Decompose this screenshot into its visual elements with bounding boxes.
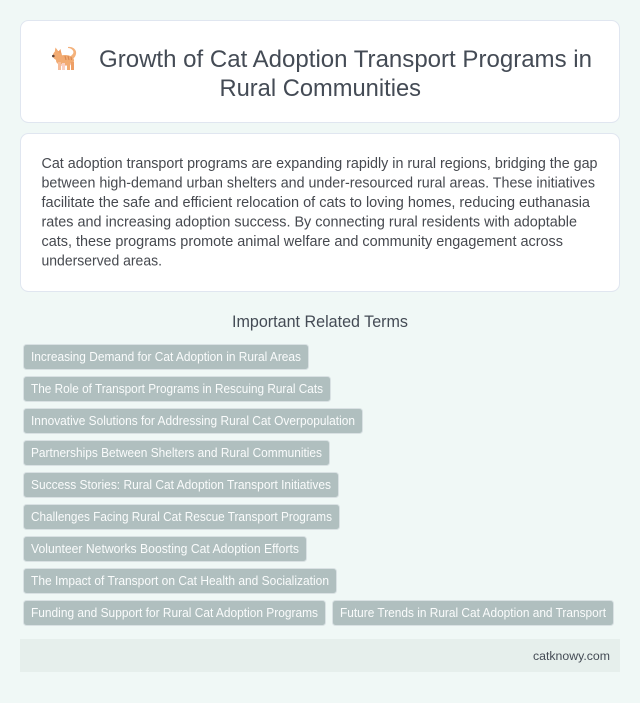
text block: description: rates and increasing adoption success. By connecting rural residents with adoptable (42, 214, 577, 230)
heading: related terms: Important Related Terms (232, 313, 408, 331)
icon: cat (52, 47, 76, 70)
tag: success stories (24, 472, 338, 498)
tag: impact of transport: The Impact of Transport on Cat Health and Socialization (31, 574, 329, 588)
title: Growth of Cat Adoption Transport Programs in (99, 46, 592, 73)
panel: description card (20, 134, 620, 292)
title (99, 46, 592, 102)
tag: partnerships: Partnerships Between Shelters and Rural Communities (31, 446, 322, 460)
text block: description: Cat adoption transport programs are expanding rapidly in rural regions, bridging the gap (42, 156, 598, 172)
tag: challenges: Challenges Facing Rural Cat Rescue Transport Programs (31, 510, 332, 524)
tag: funding and support: Funding and Support for Rural Cat Adoption Programs (31, 606, 318, 620)
footer (20, 639, 620, 672)
text block: description: cats, these programs promote animal welfare and community engagement across (42, 234, 563, 250)
tag: success stories: Success Stories: Rural Cat Adoption Transport Initiatives (31, 478, 331, 492)
tag: innovative solutions: Innovative Solutions for Addressing Rural Cat Overpopulation (31, 414, 355, 428)
tag: role of transport: The Role of Transport Programs in Rescuing Rural Cats (31, 382, 323, 396)
tag: increasing demand (24, 344, 308, 370)
tag: increasing demand: Increasing Demand for Cat Adoption in Rural Areas (31, 350, 301, 364)
tag: innovative solutions (24, 408, 362, 434)
tag: role of transport (24, 376, 330, 402)
tag: future trends: Future Trends in Rural Cat Adoption and Transport (340, 606, 606, 620)
tag: partnerships (24, 440, 330, 466)
title: Rural Communities (220, 75, 421, 102)
text block: description: facilitate the safe and efficient relocation of cats to loving homes, reducing euthanasia (42, 195, 590, 211)
text block: description (42, 156, 598, 270)
text block: description: between high-demand urban shelters and under-resourced rural areas. These initiatives (42, 176, 595, 192)
footer source text: catknowy.com (533, 649, 610, 663)
tag: volunteer networks: Volunteer Networks Boosting Cat Adoption Efforts (31, 542, 299, 556)
tag: challenges (24, 504, 340, 530)
tag: volunteer networks (24, 536, 306, 562)
tag: future trends (332, 600, 614, 626)
tag: impact of transport (24, 568, 336, 594)
text block: description: underserved areas. (42, 254, 162, 270)
panel: title card (20, 20, 620, 122)
tag: funding and support (24, 600, 326, 626)
